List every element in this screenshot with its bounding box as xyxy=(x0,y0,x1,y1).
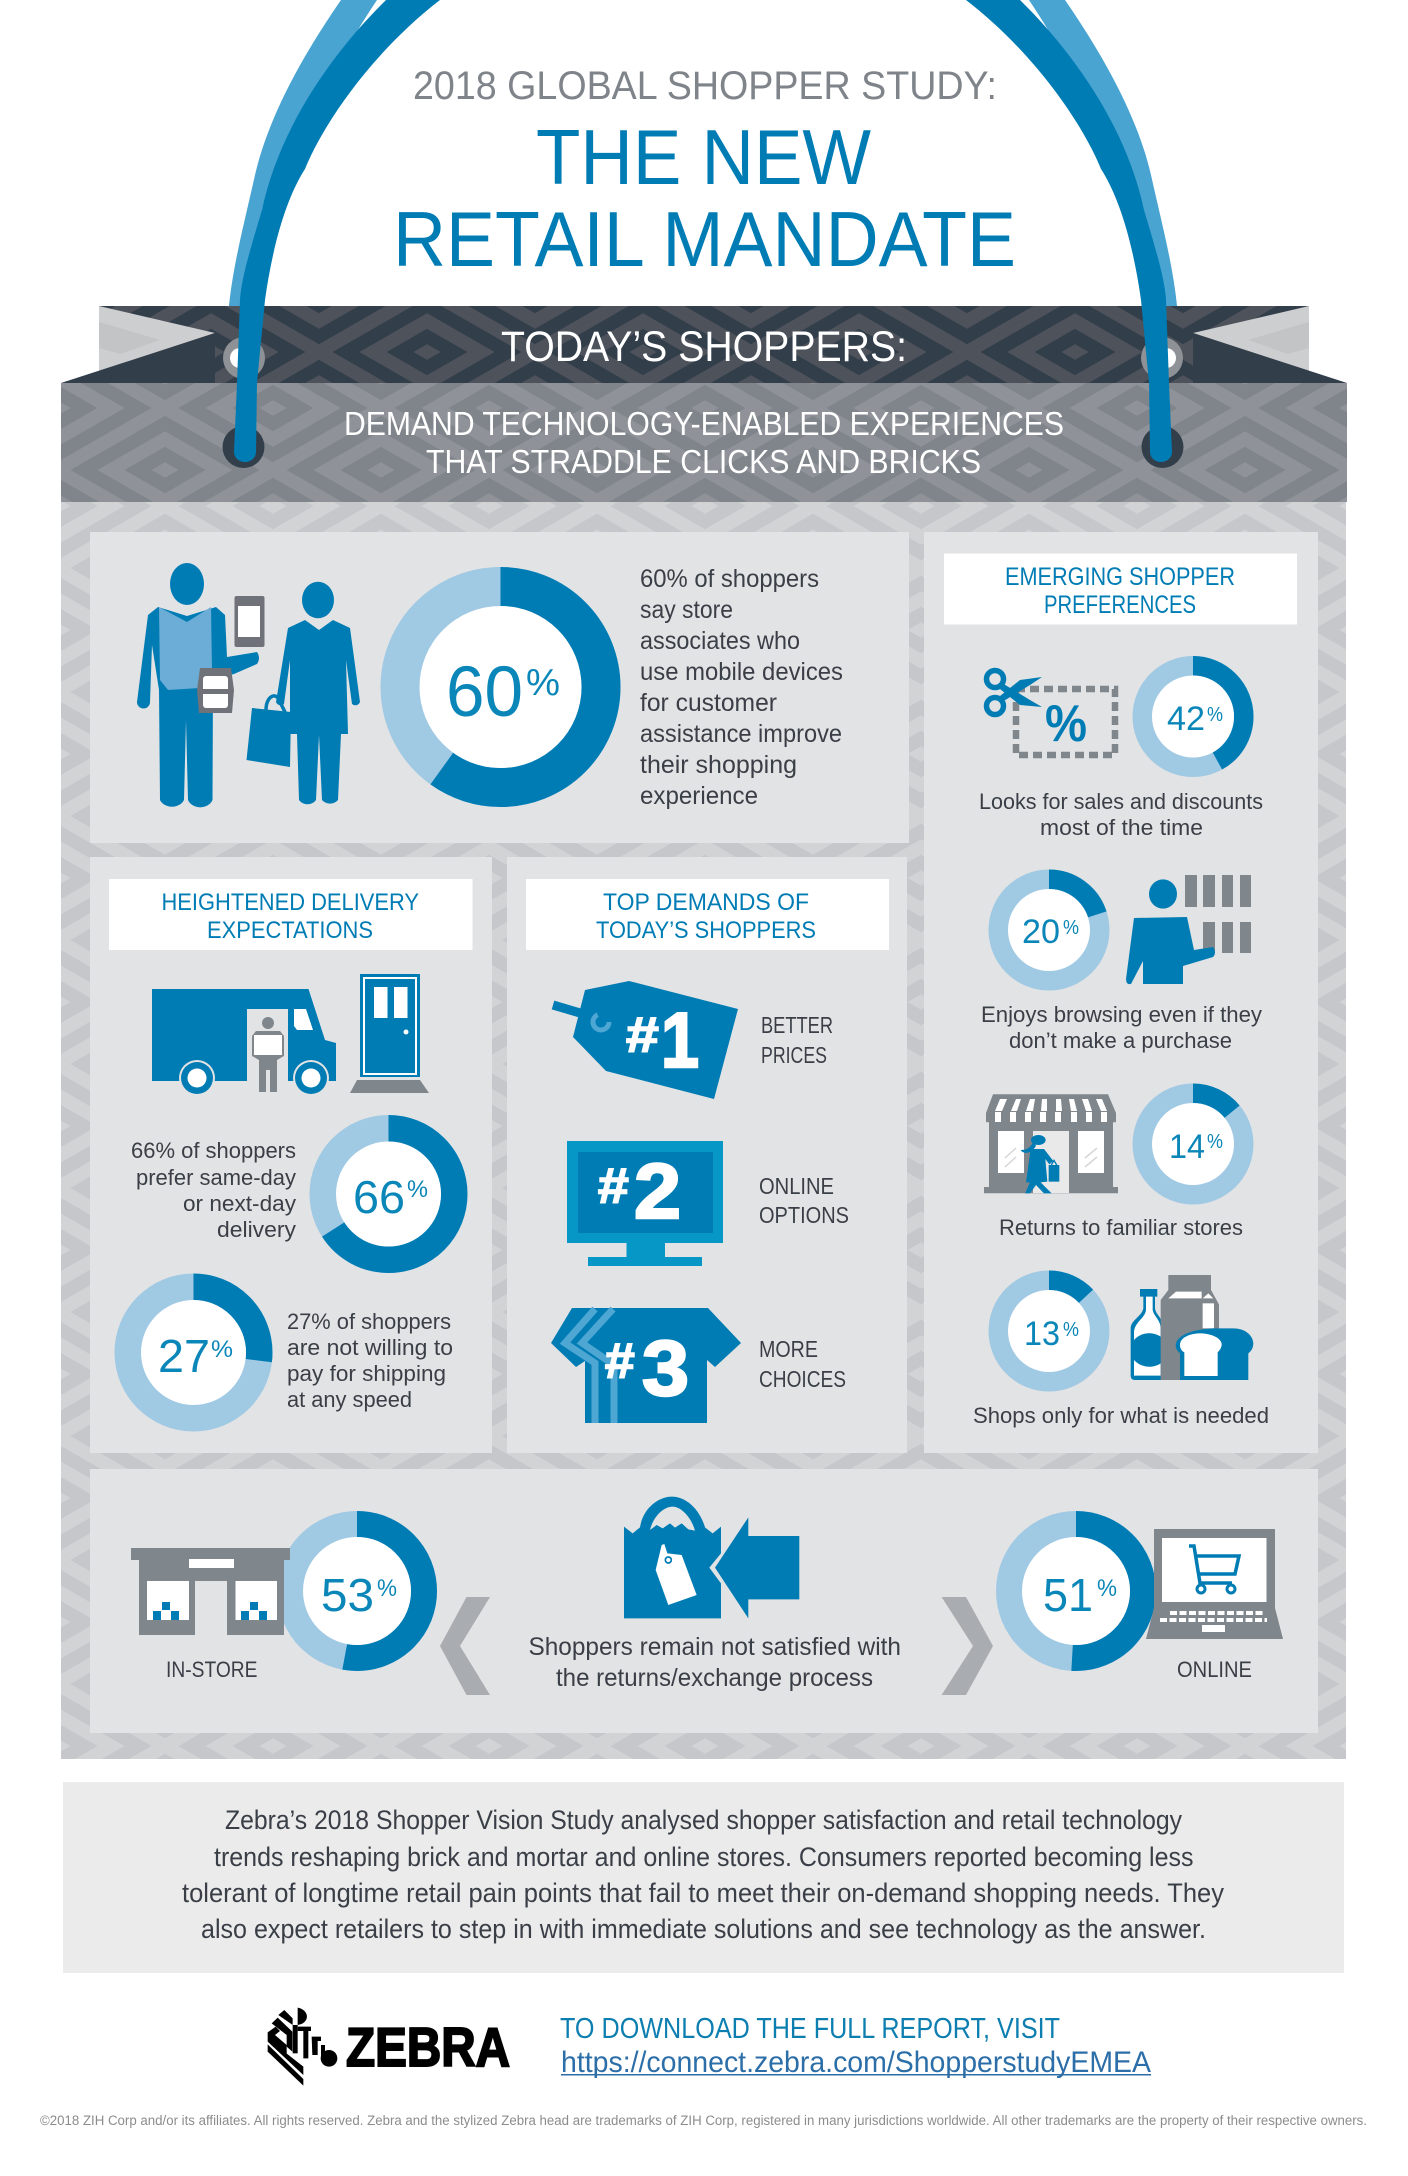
label: sales and discounts: most of the time xyxy=(1040,815,1203,840)
chart: 60 percent donut xyxy=(380,567,620,807)
text: 60 percent description: use mobile devices xyxy=(640,658,843,686)
label: sales and discounts xyxy=(979,789,1263,840)
label: online options: ONLINE xyxy=(759,1173,834,1199)
text: 60 percent description: experience xyxy=(640,782,758,810)
label: only what is needed: Shops only for what is needed xyxy=(973,1403,1269,1428)
label: better prices: BETTER xyxy=(761,1012,833,1038)
icon: scissors and coupon xyxy=(986,670,1115,755)
label: more choices: CHOICES xyxy=(759,1366,846,1392)
icon: number 1 price tag xyxy=(553,981,738,1099)
icon: laptop with cart xyxy=(1146,1529,1283,1639)
text: 27 percent description: 27% of shoppers xyxy=(287,1309,451,1334)
chart: 27 percent donut xyxy=(114,1274,272,1432)
label: in-store: IN-STORE xyxy=(166,1657,258,1682)
text: 66 percent description: 66% of shoppers xyxy=(131,1138,296,1163)
text: 27 percent description: are not willing to xyxy=(287,1335,453,1360)
chart: 66 percent donut: % xyxy=(407,1176,428,1203)
study summary box: also expect retailers to step in with immediate solutions and see technology as the answer. xyxy=(201,1914,1206,1944)
bag body pattern xyxy=(61,502,1346,1759)
chart: 20 percent donut: 20 xyxy=(1022,913,1060,951)
text: returns not satisfied: Shoppers remain not satisfied with xyxy=(528,1633,901,1661)
bag back fold band xyxy=(61,306,1347,383)
heading: delivery xyxy=(109,879,472,950)
chart: 13 percent donut: 13 xyxy=(1024,1315,1060,1353)
chart: 60 percent donut: % xyxy=(526,662,560,704)
text: returns not satisfied: the returns/exchange process xyxy=(556,1664,873,1692)
icon: number 3 t-shirt xyxy=(551,1308,741,1423)
text: 66 percent description: or next-day xyxy=(183,1191,296,1216)
icon: browsing person xyxy=(1126,875,1251,984)
text: 60 percent description: for customer xyxy=(640,689,777,717)
panel: top demands xyxy=(507,857,907,1453)
heading: emerging preferences xyxy=(944,554,1297,624)
text: 60 percent description: associates who xyxy=(640,627,800,655)
label: more choices: MORE xyxy=(759,1336,818,1362)
heading: top demands: TODAY’S SHOPPERS xyxy=(596,917,816,944)
heading: top demands xyxy=(526,879,889,950)
chart: 51 percent donut: % xyxy=(1097,1575,1117,1602)
chart: 66 percent donut: 66 xyxy=(353,1171,405,1223)
text: 60 percent description: say store xyxy=(640,596,733,624)
bag handles, back strands xyxy=(229,0,1177,306)
text: 66 percent description xyxy=(131,1138,296,1242)
icon: number 3 t-shirt: # xyxy=(604,1333,634,1389)
label: online: ONLINE xyxy=(1177,1657,1252,1682)
zebra logo: ZEBRA xyxy=(346,2016,510,2078)
panel: emerging shopper preferences xyxy=(924,532,1318,1453)
study summary box: trends reshaping brick and mortar and online stores. Consumers reported becoming less xyxy=(214,1842,1194,1872)
text: 27 percent description xyxy=(287,1309,453,1412)
chart: 51 percent donut xyxy=(996,1511,1156,1671)
text: 66 percent description: prefer same-day xyxy=(136,1165,296,1190)
bag front band xyxy=(61,383,1347,502)
banner subheading: THAT STRADDLE CLICKS AND BRICKS xyxy=(426,443,981,480)
icon: door xyxy=(350,974,429,1093)
icon: number 1 price tag: 1 xyxy=(661,996,699,1084)
label: browsing: don’t make a purchase xyxy=(1009,1028,1232,1053)
copyright note: ©2018 ZIH Corp and/or its affiliates. All rights reserved. Zebra and the stylized Zebra head are trademarks of ZIH Corp, registered in many jurisdictions worldwide. All other trademarks are the property of their respective owners. xyxy=(40,2113,1367,2128)
arrow: left chevron xyxy=(440,1597,490,1695)
zebra logo xyxy=(268,2008,510,2086)
chart: 53 percent donut: 53 xyxy=(321,1569,374,1621)
label: more choices xyxy=(759,1336,846,1392)
chart: 51 percent donut: 51 xyxy=(1043,1569,1093,1621)
heading: delivery: EXPECTATIONS xyxy=(207,917,373,944)
call to action: download report xyxy=(560,2013,1151,2079)
icon: shopping bag with return arrow xyxy=(624,1497,799,1618)
icon: number 2 monitor: 2 xyxy=(634,1147,681,1235)
chart: 27 percent donut: 27 xyxy=(158,1330,210,1382)
arrow: right chevron xyxy=(942,1597,993,1695)
banner heading: today's shoppers: TODAY’S SHOPPERS: xyxy=(501,323,907,371)
heading: emerging preferences: PREFERENCES xyxy=(1044,591,1196,619)
panel: returns and exchange xyxy=(90,1469,1318,1733)
icon: groceries xyxy=(1131,1275,1253,1380)
chart: 20 percent donut xyxy=(988,870,1110,990)
icon: number 2 monitor: # xyxy=(597,1158,628,1214)
text: returns not satisfied xyxy=(528,1633,901,1692)
chart: 13 percent donut: % xyxy=(1063,1319,1079,1341)
title block: RETAIL MANDATE xyxy=(393,195,1016,283)
icon: in-store building xyxy=(131,1548,290,1635)
banner subheading xyxy=(344,405,1064,480)
chart: 53 percent donut: % xyxy=(377,1575,397,1602)
panel: 60 percent store associates xyxy=(90,532,909,843)
label: online options xyxy=(759,1173,849,1228)
chart: 14 percent donut: % xyxy=(1207,1131,1223,1153)
chart: 42 percent donut: 42 xyxy=(1167,700,1205,738)
heading: top demands: TOP DEMANDS OF xyxy=(603,889,809,916)
icon: number 2 monitor xyxy=(567,1141,723,1266)
study summary box: Zebra’s 2018 Shopper Vision Study analysed shopper satisfaction and retail technology xyxy=(225,1805,1182,1835)
label: online options: OPTIONS xyxy=(759,1202,849,1228)
bag upper eyelets xyxy=(223,337,1183,379)
chart: 53 percent donut xyxy=(277,1511,437,1671)
label: sales and discounts: Looks for sales and discounts xyxy=(979,789,1263,814)
heading: delivery: HEIGHTENED DELIVERY xyxy=(162,889,419,916)
chart: 60 percent donut: 60 xyxy=(446,653,523,732)
chart: 27 percent donut: % xyxy=(211,1336,233,1363)
study summary box: tolerant of longtime retail pain points that fail to meet their on-demand shopping needs. They xyxy=(182,1878,1224,1908)
title block: 2018 GLOBAL SHOPPER STUDY: xyxy=(413,64,997,108)
text: 27 percent description: pay for shipping xyxy=(287,1361,446,1386)
chart: 20 percent donut: % xyxy=(1063,917,1079,939)
banner subheading: DEMAND TECHNOLOGY-ENABLED EXPERIENCES xyxy=(344,405,1064,442)
icon: number 3 t-shirt: 3 xyxy=(642,1324,689,1412)
heading: emerging preferences: EMERGING SHOPPER xyxy=(1005,563,1235,591)
chart: 13 percent donut xyxy=(988,1270,1110,1392)
icon: scissors and coupon: % xyxy=(1045,695,1087,753)
icon: delivery truck xyxy=(152,989,336,1096)
panel: heightened delivery expectations xyxy=(90,857,492,1453)
bag handles, front strands xyxy=(234,0,1172,462)
label: familiar stores: Returns to familiar stores xyxy=(999,1215,1243,1240)
label: better prices xyxy=(761,1012,833,1068)
title block xyxy=(393,64,1016,283)
bag lower eyelets xyxy=(222,426,1184,468)
chart: 14 percent donut: 14 xyxy=(1169,1128,1205,1166)
call to action: download report: https://connect.zebra.com/ShopperstudyEMEA xyxy=(561,2046,1151,2079)
chart: 66 percent donut xyxy=(310,1115,468,1273)
chart: 42 percent donut xyxy=(1132,656,1254,777)
label: browsing: Enjoys browsing even if they xyxy=(981,1002,1262,1027)
icon: associate with mobile device and shopper xyxy=(137,563,360,807)
text: 66 percent description: delivery xyxy=(217,1217,296,1242)
icon: storefront with shopper xyxy=(984,1094,1118,1193)
icon: number 1 price tag: # xyxy=(625,1007,658,1063)
study summary box xyxy=(63,1782,1344,1973)
chart: 42 percent donut: % xyxy=(1207,704,1223,726)
label: better prices: PRICES xyxy=(761,1042,827,1068)
text: 60 percent description xyxy=(640,565,843,810)
label: browsing xyxy=(981,1002,1262,1053)
text: 27 percent description: at any speed xyxy=(287,1387,412,1412)
title block: THE NEW xyxy=(536,113,871,201)
chart: 14 percent donut xyxy=(1132,1084,1254,1204)
text: 60 percent description: 60% of shoppers xyxy=(640,565,819,593)
call to action: download report: TO DOWNLOAD THE FULL REPORT, VISIT xyxy=(560,2013,1060,2045)
text: 60 percent description: assistance improve xyxy=(640,720,842,748)
text: 60 percent description: their shopping xyxy=(640,751,797,779)
